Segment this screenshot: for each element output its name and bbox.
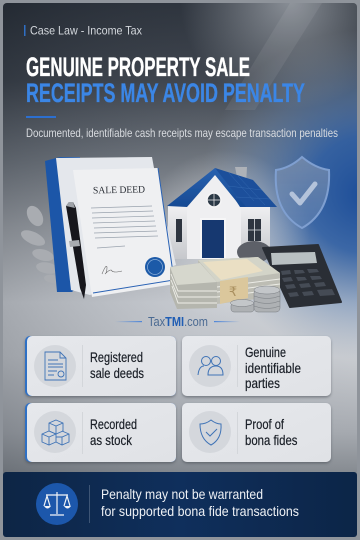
illustration <box>19 157 341 312</box>
card: registered sale deeds <box>25 336 176 396</box>
card: genuine identifiable parties: parties <box>245 375 280 391</box>
icon: house <box>167 167 277 263</box>
card: registered sale deeds: Registered <box>90 349 143 365</box>
card: proof of bona fides <box>182 403 331 462</box>
icon: scales of justice <box>36 483 78 525</box>
icon: people <box>198 356 223 375</box>
logo: TaxTMI.com: TaxTMI.com <box>148 315 208 329</box>
icon: calculator <box>263 245 341 307</box>
icon: cash stacks: ₹ <box>229 284 237 299</box>
category tag: Case Law - Income Tax <box>30 24 142 38</box>
card: proof of bona fides: Proof of <box>245 416 284 432</box>
sale deed document <box>73 168 175 297</box>
footer text <box>101 486 299 519</box>
back paper <box>56 157 176 295</box>
icon: blue folder <box>45 157 80 292</box>
logo: TaxTMI.com <box>115 315 240 329</box>
card: recorded as stock: as stock <box>90 432 133 448</box>
card: genuine identifiable parties <box>182 336 331 396</box>
icon: cash stacks <box>170 257 280 309</box>
footer text: for supported bona fide transactions <box>101 503 299 519</box>
card: recorded as stock <box>25 403 176 462</box>
footer text: Penalty may not be warranted <box>101 486 263 502</box>
icon: pen <box>66 202 86 299</box>
card: recorded as stock: Recorded <box>90 416 137 432</box>
icon: document <box>45 352 66 380</box>
icon: coins <box>230 286 280 312</box>
footer banner <box>3 472 357 537</box>
card: registered sale deeds: sale deeds <box>90 365 144 381</box>
card: genuine identifiable parties: identifiable <box>245 360 301 376</box>
icon: shield <box>276 157 329 228</box>
icon: shield check <box>200 420 221 445</box>
sale deed document: SALE DEED <box>93 185 145 196</box>
title underline <box>26 116 56 118</box>
icon: leaves <box>19 203 61 284</box>
title <box>26 52 305 108</box>
card: genuine identifiable parties: Genuine <box>245 344 286 360</box>
icon: cubes <box>42 420 69 445</box>
card: proof of bona fides: bona fides <box>245 432 298 448</box>
